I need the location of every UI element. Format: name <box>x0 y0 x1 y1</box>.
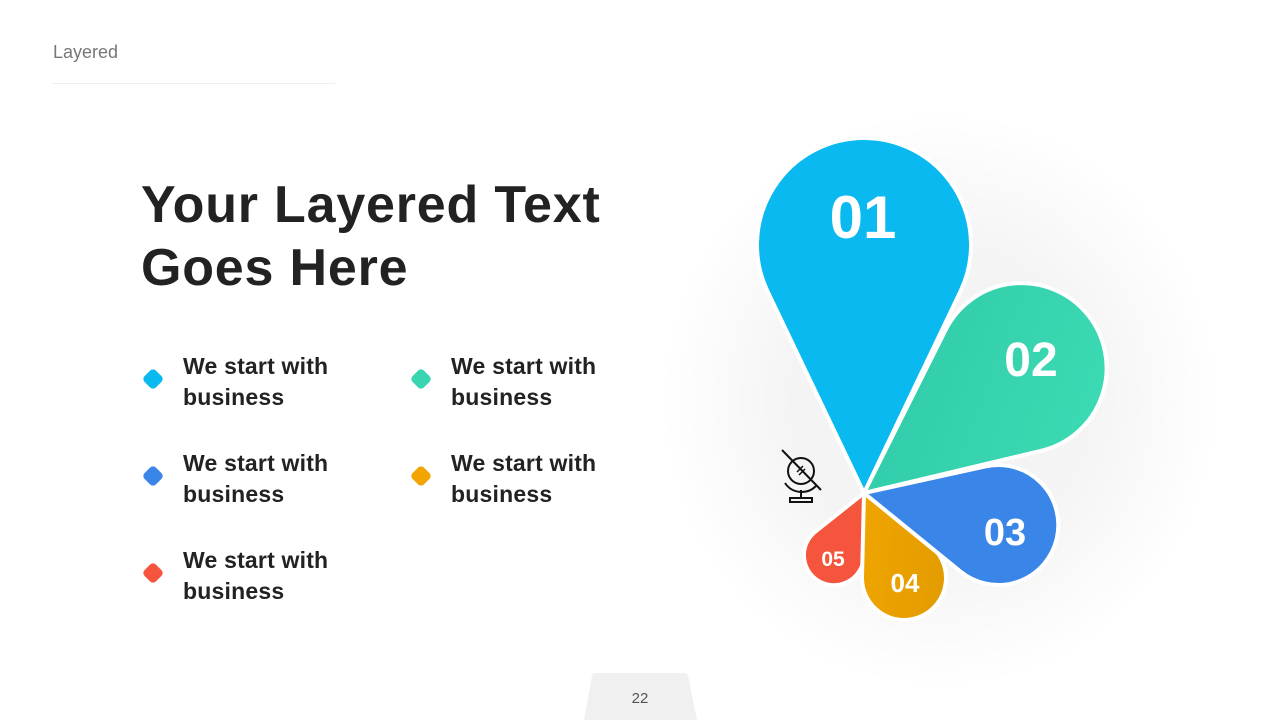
petal numbers: 01 <box>830 184 896 251</box>
petal numbers: 04 <box>891 568 920 598</box>
petal numbers <box>821 184 1058 598</box>
petal 03 <box>850 435 1071 597</box>
bullet 2 <box>411 353 596 410</box>
page number tab: 22 <box>632 690 648 707</box>
bullet 3: business <box>183 481 284 507</box>
bullet 2: business <box>451 384 552 410</box>
petal numbers: 05 <box>821 548 845 571</box>
bullet 2: We start with <box>451 353 596 379</box>
bullet 3: We start with <box>183 450 328 476</box>
title: Your Layered Text <box>141 176 601 234</box>
title: Goes Here <box>141 239 408 297</box>
petal 05 <box>794 480 891 595</box>
header label: Layered <box>53 42 118 62</box>
bullet 1: We start with <box>183 353 328 379</box>
icon: globe <box>782 450 821 502</box>
petal 01 <box>757 138 971 493</box>
petal numbers: 03 <box>984 512 1026 554</box>
title <box>141 176 601 297</box>
bullet 4 <box>411 450 596 507</box>
bullet 4: business <box>451 481 552 507</box>
bullet 1: business <box>183 384 284 410</box>
bullet 5 <box>143 547 328 604</box>
page number tab <box>584 673 697 720</box>
petal 04 <box>826 475 960 634</box>
bullet list <box>143 353 596 604</box>
bullet 5: We start with <box>183 547 328 573</box>
bullet 5: business <box>183 578 284 604</box>
bullet 4: We start with <box>451 450 596 476</box>
bullet 3 <box>143 450 328 507</box>
bullet 1 <box>143 353 328 410</box>
petal numbers: 02 <box>1004 334 1058 387</box>
petal 02 <box>811 249 1141 560</box>
